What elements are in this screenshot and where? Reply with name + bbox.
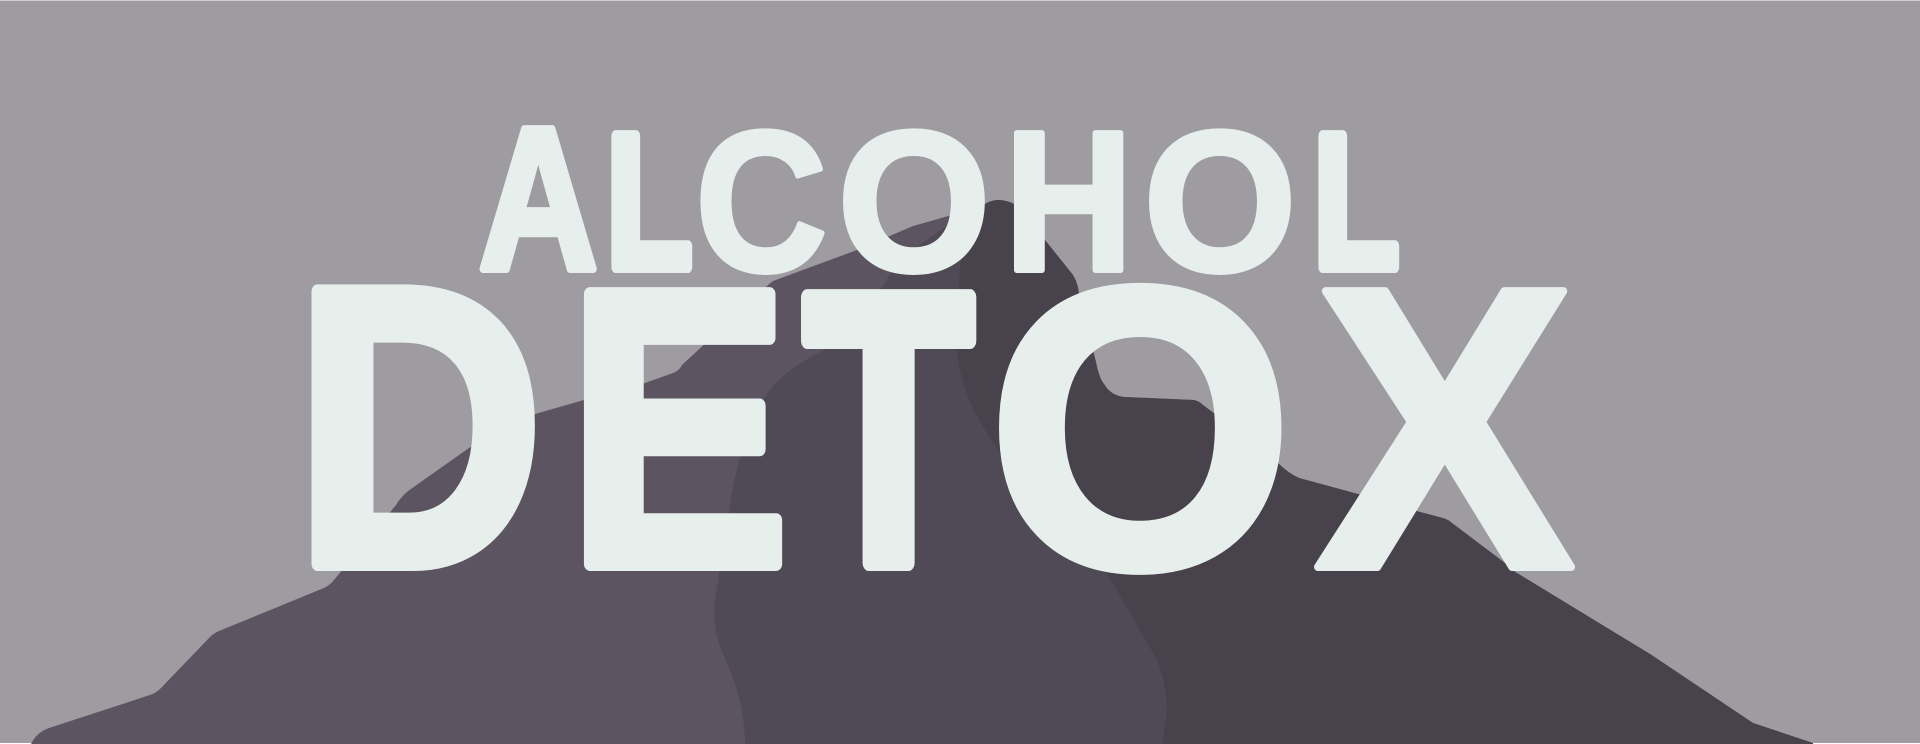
heading: ALCOHOL: L	[606, 94, 692, 308]
mountain illustration	[31, 200, 1813, 744]
mountain: light left face and full silhouette	[31, 200, 1813, 744]
heading: DETOX: T	[804, 215, 973, 645]
heading: ALCOHOL: H	[1005, 90, 1133, 312]
heading: DETOX: D	[295, 205, 543, 648]
heading: ALCOHOL	[479, 87, 1399, 314]
heading: ALCOHOL: O	[1143, 90, 1297, 314]
heading: DETOX: E	[568, 209, 789, 647]
heading: DETOX: X	[1314, 204, 1577, 652]
mountain: middle face	[714, 206, 1260, 744]
heading: DETOX: O	[987, 206, 1294, 652]
heading: DETOX	[295, 204, 1577, 652]
heading: ALCOHOL: O	[837, 90, 991, 314]
heading: ALCOHOL: L	[1313, 94, 1399, 308]
heading: ALCOHOL: A	[479, 87, 598, 313]
heading: ALCOHOL: C	[695, 89, 827, 313]
mountain: dark right face	[956, 200, 1813, 744]
